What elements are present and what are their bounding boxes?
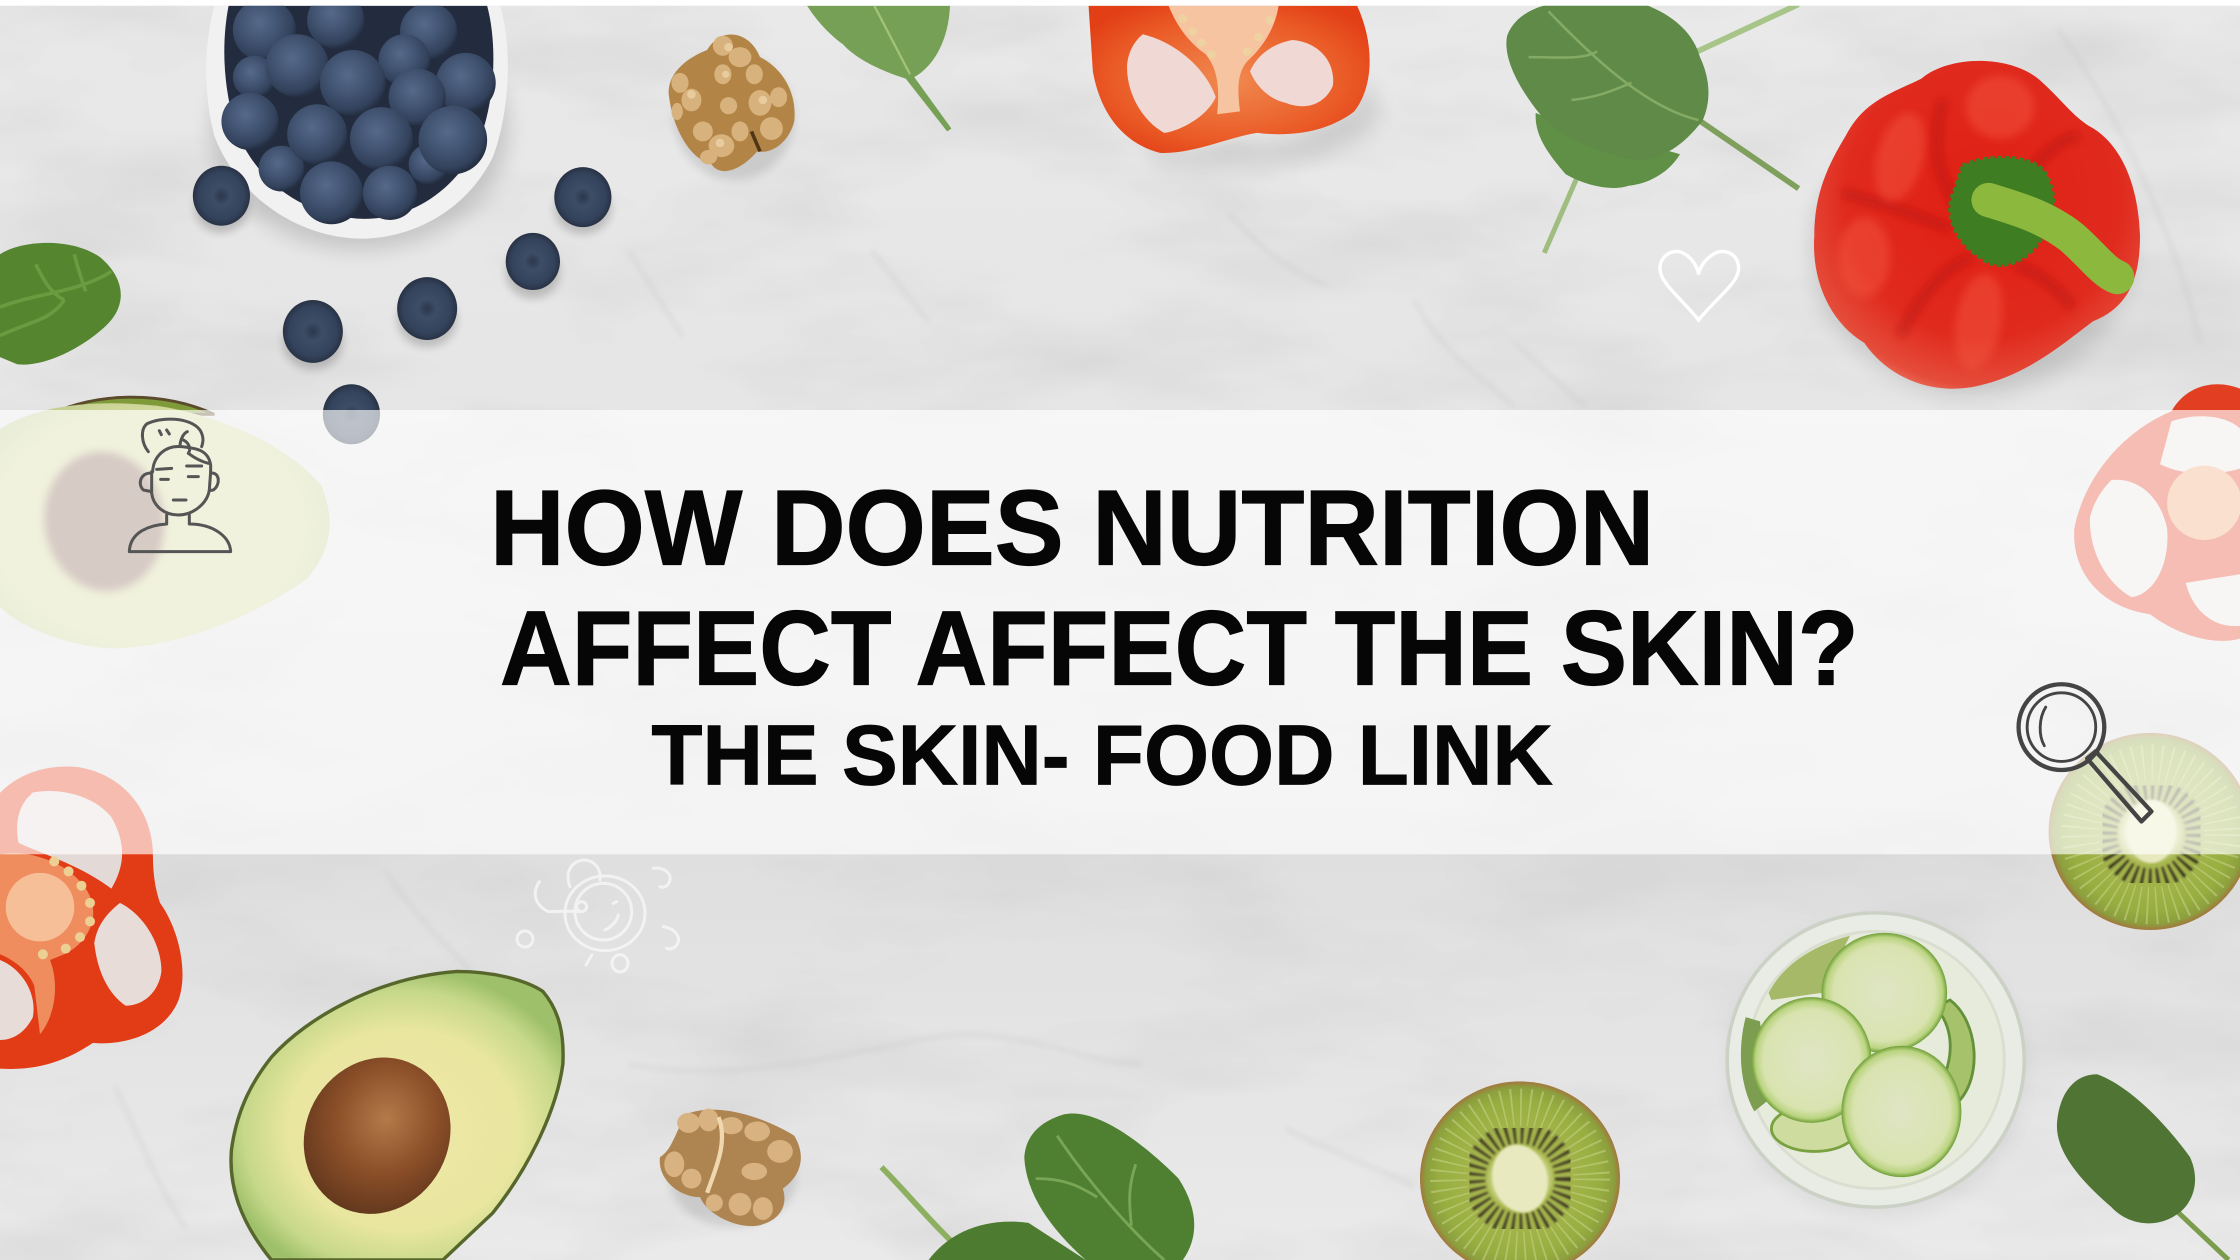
food: spinach top right	[1506, 4, 1799, 253]
food: spinach leaf top centre	[807, 6, 951, 131]
food: spinach leaf bottom right	[2057, 1074, 2229, 1260]
food: walnut bottom	[660, 1109, 801, 1227]
title: line 2: AFFECT AFFECT THE SKIN?	[500, 589, 1859, 707]
food: kiwi bottom	[1420, 1081, 1620, 1260]
food: kiwi right	[2049, 733, 2240, 930]
food: spinach leaf left	[0, 243, 121, 365]
icon: heart outline	[1660, 251, 1739, 320]
food: pepper slice left	[0, 767, 183, 1069]
food: loose blueberries	[193, 166, 611, 444]
food: avocado half left	[0, 397, 330, 649]
subtitle: THE SKIN- FOOD LINK	[651, 707, 1553, 803]
icon: smiling sun glow	[517, 789, 679, 972]
food: cucumber glass	[1727, 913, 2026, 1217]
food: avocado half bottom	[231, 971, 563, 1260]
title: line 1: HOW DOES NUTRITION	[490, 467, 1654, 587]
title band	[0, 410, 2240, 854]
food: walnut top	[669, 35, 795, 180]
icon: magnifying glass	[2019, 684, 2151, 821]
food: blueberry bowl	[206, 0, 509, 250]
food: spinach bottom	[881, 1113, 1194, 1260]
top white edge	[0, 0, 2240, 6]
icon: face with towel	[129, 419, 231, 552]
food: pepper slice top	[1089, 6, 1383, 168]
food: red bell pepper	[1811, 61, 2140, 393]
food: pepper slice right	[2074, 384, 2240, 641]
